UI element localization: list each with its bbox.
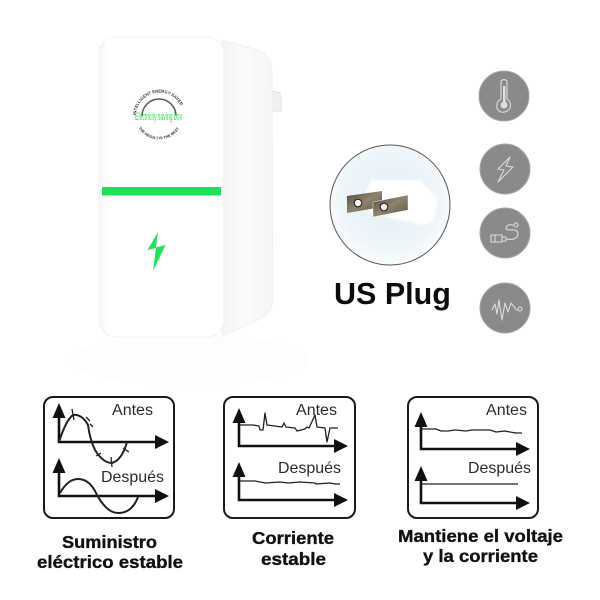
plug photo circle (330, 145, 450, 265)
caption: Suministro eléctrico estable: eléctrico estable (37, 552, 183, 572)
icon: waveform (480, 283, 530, 333)
device: energy saving box: Electricity saving box (135, 111, 182, 123)
caption: Suministro eléctrico estable (37, 532, 183, 572)
chart: unstable wave (52, 403, 169, 467)
icon: green lightning bolt (148, 232, 166, 271)
left prong (347, 191, 382, 213)
label: Después: Después (278, 460, 341, 477)
icon: lightning (480, 144, 530, 194)
caption: Corriente estable (252, 528, 334, 569)
caption: Corriente estable: Corriente (252, 528, 334, 548)
label: Después: Después (101, 469, 164, 486)
logo: Electricity saving box: THE RESULT IS THE BEST (139, 126, 178, 140)
logo: Electricity saving box: INTELLIGENT ENERGY SAVER (133, 90, 183, 115)
chart: stable wave (52, 458, 169, 513)
caption: Suministro eléctrico estable: Suministro (62, 532, 157, 552)
caption: Mantiene el voltaje y la corriente: Mantiene el voltaje (398, 526, 563, 546)
device front (99, 37, 224, 337)
panel: suministro eléctrico estable (44, 397, 174, 518)
device side (222, 40, 273, 336)
green light bar (102, 187, 221, 196)
chart: slightly varying line (414, 412, 530, 456)
icon: thermometer (479, 71, 529, 121)
label: Antes: Antes (296, 402, 337, 419)
label: Después: Después (468, 460, 531, 477)
caption: Corriente estable: estable (261, 549, 326, 569)
panel: mantiene el voltaje y la corriente (408, 397, 538, 518)
plug prong (272, 91, 281, 111)
panel: corriente estable (224, 397, 355, 518)
label: Antes: Antes (112, 402, 153, 419)
logo: Electricity saving box (133, 90, 183, 140)
right prong (373, 195, 408, 217)
icon: adapter and cable (480, 208, 530, 258)
caption: Mantiene el voltaje y la corriente (398, 526, 563, 566)
plug body (366, 180, 438, 224)
heading: US Plug: US Plug (334, 277, 451, 311)
chart: stable current (232, 462, 348, 507)
device shadow (70, 334, 310, 386)
device: energy saving box (98, 36, 282, 338)
caption: Mantiene el voltaje y la corriente: y la corriente (423, 546, 538, 566)
chart: flat line (414, 466, 530, 510)
label: Antes: Antes (486, 402, 527, 419)
chart: noisy current (232, 408, 348, 453)
